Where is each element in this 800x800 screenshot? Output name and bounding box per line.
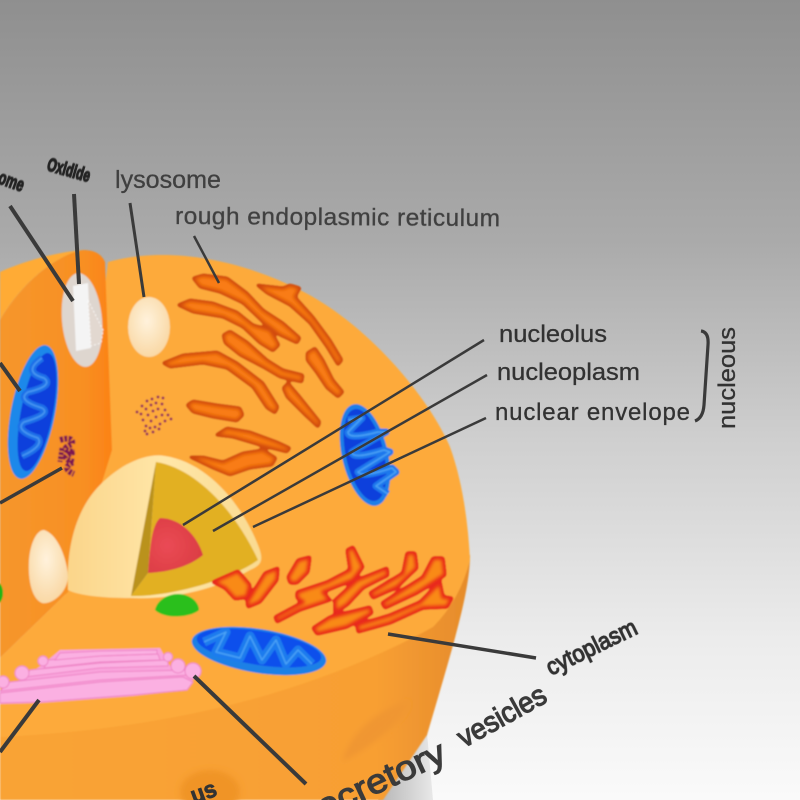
line: nucleoplasm xyxy=(213,375,487,531)
lysosome xyxy=(128,297,170,357)
mitochondrion: left wall xyxy=(0,341,68,483)
pedestal xyxy=(378,733,433,800)
cell body xyxy=(0,250,470,800)
line: purple organelle xyxy=(0,468,62,503)
line: nuclear envelope xyxy=(253,418,486,527)
label: nuclear envelope: nuclear envelope xyxy=(495,399,690,426)
label: lysosome: lysosome xyxy=(115,166,221,194)
line: oxidide xyxy=(74,194,79,284)
vesicle near nucleus xyxy=(29,530,68,603)
nucleolus core xyxy=(148,518,203,573)
bracket: nucleus group xyxy=(695,331,708,421)
organelle: translucent xyxy=(58,271,106,369)
nucleus dome xyxy=(68,455,261,598)
cell floor xyxy=(0,450,470,737)
line: left mitochondrion xyxy=(0,363,20,391)
label: secretory vesicles: vesicles xyxy=(452,679,552,754)
label: nucleolus: nucleolus xyxy=(499,321,607,348)
pointer lines xyxy=(0,194,536,784)
golgi backing xyxy=(0,648,193,704)
label: secretory vesicles xyxy=(293,679,552,800)
label: cytoplasm: cytoplasm xyxy=(542,614,642,681)
nucleus xyxy=(68,455,261,598)
label: nucleoplasm: nucleoplasm xyxy=(497,359,640,386)
mitochondrion: right wall xyxy=(331,399,399,511)
line: golgi xyxy=(0,700,39,752)
line: lysosome xyxy=(130,203,144,297)
green vesicle left edge xyxy=(0,583,3,603)
left wall rim xyxy=(0,250,83,320)
smooth endoplasmic reticulum on floor xyxy=(213,547,452,634)
cell back wall xyxy=(60,255,470,640)
line: cytoplasm xyxy=(388,634,536,658)
golgi apparatus xyxy=(0,648,201,704)
left wall xyxy=(0,250,112,658)
line: rough er xyxy=(194,236,219,283)
label: nucleous: nucleous xyxy=(714,327,741,429)
ribosome dots xyxy=(136,396,172,435)
rough er fragment: left wall purple xyxy=(60,439,74,474)
green vesicle xyxy=(155,594,199,616)
rough endoplasmic reticulum on wall xyxy=(163,275,343,475)
nuclear envelope cut, left xyxy=(131,462,156,596)
cell lower side xyxy=(0,555,470,800)
pit: right side xyxy=(342,702,408,762)
label: oxidide: Oxidide xyxy=(45,154,93,186)
nuclear envelope cut, right xyxy=(131,462,258,596)
line: secretory vesicles xyxy=(194,676,306,784)
line: upper left label xyxy=(10,206,73,301)
line: nucleolus xyxy=(183,340,484,525)
mitochondrion: floor xyxy=(188,619,330,683)
pit: lower centre xyxy=(180,770,240,800)
label: rough endoplasmic reticulum: rough endoplasmic reticulum xyxy=(175,203,500,232)
